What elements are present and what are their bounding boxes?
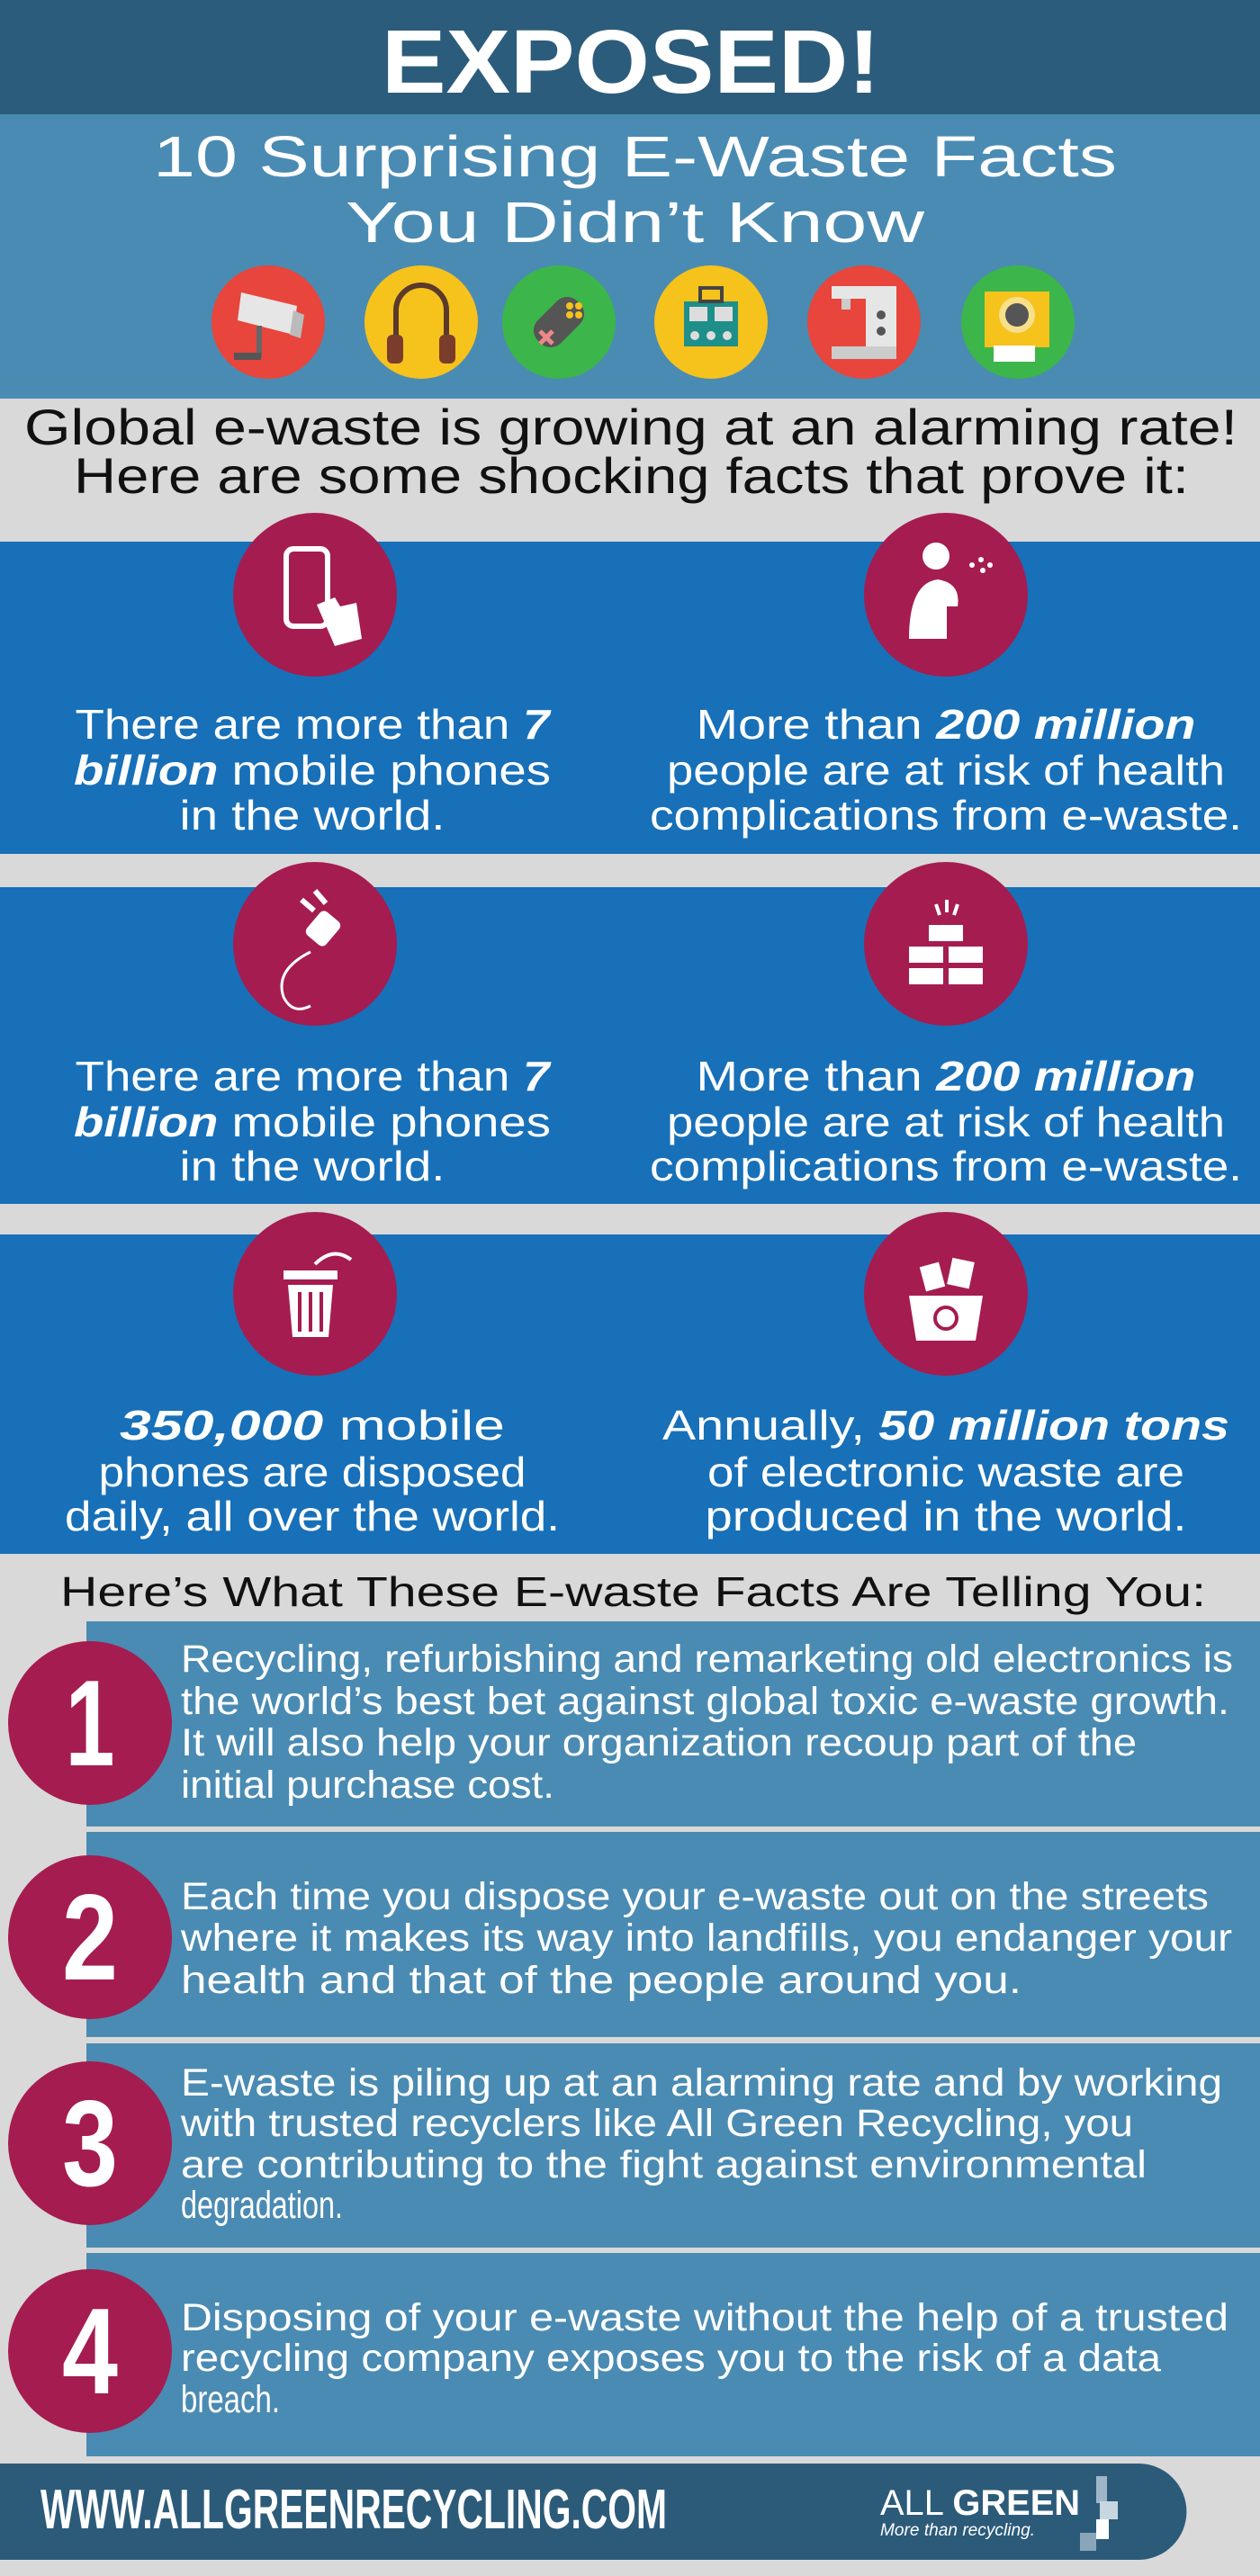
- panel: facts row 1: in the world.: [180, 792, 445, 839]
- icon: gold bars: [864, 862, 1028, 1026]
- icon: coughing person: [864, 513, 1028, 677]
- fact: mobile phones (repeat): There are more than 7: [76, 1053, 552, 1100]
- title bar: EXPOSED!: [382, 12, 880, 112]
- item 3: degradation.: [181, 2184, 343, 2227]
- icon: gamepad: [502, 265, 616, 379]
- item 2: 2: [62, 1869, 118, 2006]
- panel: facts row 3: produced in the world.: [706, 1493, 1186, 1539]
- panel: facts row 2: people are at risk of health: [667, 1099, 1225, 1145]
- panel: facts row 2: complications from e-waste.: [650, 1143, 1242, 1189]
- icon: headphones: [364, 265, 478, 379]
- panel: facts row 1: people are at risk of health: [667, 747, 1225, 794]
- item 1: [8, 1621, 1260, 1827]
- intro text: Here are some shocking facts that prove it:: [74, 447, 1189, 504]
- fact: mobile phones: There are more than 7: [76, 701, 552, 748]
- panel: facts row 1: complications from e-waste.: [650, 792, 1242, 839]
- panel: facts row 3: [0, 1212, 1260, 1554]
- subtitle panel: You Didn’t Know: [346, 190, 925, 255]
- icon: recycle box: [864, 1212, 1028, 1376]
- item 2: [8, 1832, 1260, 2037]
- item 3: are contributing to the fight against environmental: [181, 2143, 1147, 2186]
- intro text: [24, 399, 1238, 504]
- panel: facts row 1: [0, 513, 1260, 854]
- item 1: Recycling, refurbishing and remarketing old electronics is: [181, 1638, 1233, 1681]
- panel: facts row 3: of electronic waste are: [707, 1449, 1184, 1495]
- item 2: health and that of the people around you.: [181, 1959, 1022, 2002]
- subtitle panel: 10 Surprising E-Waste Facts: [153, 124, 1117, 189]
- icon row: electronics: [212, 265, 1075, 379]
- item 2: where it makes its way into landfills, you endanger your: [180, 1916, 1232, 1960]
- panel: facts row 2: [0, 862, 1260, 1204]
- item 1: the world’s best bet against global toxic e-waste growth.: [181, 1680, 1229, 1723]
- icon: phone touch: [233, 513, 397, 677]
- item 4: 4: [62, 2283, 118, 2419]
- panel: facts row 3: phones are disposed: [99, 1449, 526, 1495]
- icon: coffee machine: [807, 265, 921, 379]
- icon: radio: [654, 265, 768, 379]
- logo: All Green: More than recycling.: [880, 2521, 1035, 2540]
- item 4: recycling company exposes you to the risk of a data: [181, 2337, 1161, 2380]
- heading: what facts tell you: Here’s What These E-waste Facts Are Telling You:: [60, 1568, 1206, 1615]
- logo: All Green: ALL GREEN: [880, 2483, 1080, 2523]
- panel: facts row 1: billion mobile phones: [74, 747, 551, 794]
- title bar: [0, 0, 1260, 114]
- fact: health risk: More than 200 million: [697, 701, 1195, 748]
- item 3: [8, 2043, 1260, 2248]
- icon: camera: [961, 265, 1075, 379]
- icon: trash bin: [233, 1212, 397, 1376]
- item 2: Each time you dispose your e-waste out on the streets: [181, 1875, 1209, 1918]
- fact: disposed daily: 350,000 mobile: [120, 1402, 505, 1449]
- panel: facts row 2: billion mobile phones: [74, 1099, 551, 1145]
- item 1: 1: [65, 1655, 115, 1791]
- item 3: 3: [62, 2075, 118, 2212]
- panel: facts row 3: daily, all over the world.: [65, 1493, 560, 1539]
- footer bar: [0, 2464, 1186, 2560]
- item 3: E-waste is piling up at an alarming rate and by working: [181, 2061, 1222, 2105]
- item 4: [8, 2253, 1260, 2456]
- item 4: breach.: [181, 2378, 280, 2421]
- icon: security camera: [212, 265, 325, 379]
- website url: WWW.ALLGREENRECYCLING.COM: [40, 2479, 667, 2541]
- item 1: initial purchase cost.: [181, 1764, 554, 1807]
- fact: health risk (repeat): More than 200 million: [697, 1053, 1195, 1100]
- icon: plug: [233, 862, 397, 1026]
- intro text: Global e-waste is growing at an alarming rate!: [24, 399, 1238, 455]
- subtitle panel: [0, 114, 1260, 399]
- item 1: It will also help your organization recoup part of the: [181, 1721, 1137, 1764]
- logo: All Green: [880, 2476, 1118, 2551]
- item 3: with trusted recyclers like All Green Recycling, you: [180, 2102, 1133, 2145]
- fact: 50 million tons: Annually, 50 million tons: [662, 1402, 1229, 1449]
- panel: facts row 2: in the world.: [180, 1143, 445, 1189]
- item 4: Disposing of your e-waste without the help of a trusted: [181, 2296, 1228, 2339]
